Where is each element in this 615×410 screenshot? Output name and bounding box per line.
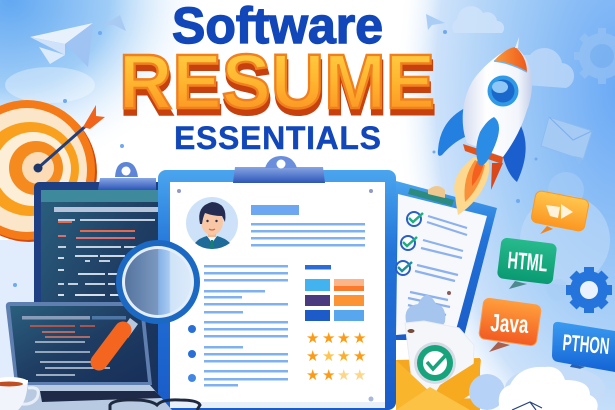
icon: magnifying glass xyxy=(99,240,200,362)
panel: checklist clipboard xyxy=(396,181,497,340)
colour swatches xyxy=(305,279,364,321)
speech bubble: Java xyxy=(478,298,542,352)
body text lines xyxy=(204,265,288,386)
speech bubble: play icon xyxy=(530,190,590,234)
right fin xyxy=(503,126,526,182)
title: RESUME: RESUME xyxy=(119,39,435,125)
icon: dark plane lines bottom xyxy=(512,402,542,410)
document xyxy=(405,321,474,398)
title: RESUME: RESUME xyxy=(120,45,436,131)
center fin xyxy=(476,117,499,165)
star ratings xyxy=(306,329,366,384)
cloud top right xyxy=(452,6,504,33)
left fin xyxy=(438,107,470,156)
laptop base xyxy=(15,385,172,410)
check badge xyxy=(414,342,456,384)
speech bubble: HTML: HTML xyxy=(506,247,549,277)
icon: glasses xyxy=(110,400,200,410)
icon: coffee cup xyxy=(0,377,38,410)
avatar xyxy=(186,197,238,249)
bullet dots xyxy=(188,325,196,382)
clipboard clip xyxy=(98,162,156,190)
cloud behind rocket xyxy=(512,48,574,88)
panel: main clipboard xyxy=(158,156,396,410)
checklist items xyxy=(396,212,467,315)
flame xyxy=(454,157,503,215)
nose cone xyxy=(494,47,527,72)
icon: blue gear xyxy=(566,267,612,313)
speech bubble: Java: Java xyxy=(490,309,530,339)
code lines xyxy=(58,220,155,295)
speech bubble: Python xyxy=(552,322,615,374)
icon: decorative dots xyxy=(13,30,538,287)
icon: background gears xyxy=(547,172,584,301)
header text lines xyxy=(251,223,365,246)
icon: rocket xyxy=(438,37,532,215)
clipboard clip xyxy=(233,156,325,183)
title: ESSENTIALS: ESSENTIALS xyxy=(174,120,381,156)
star ratings: ★★★★ xyxy=(306,329,366,347)
icon: envelope light blue xyxy=(541,117,592,165)
icon: small paper plane right xyxy=(426,14,445,30)
star ratings: ★★★★ xyxy=(306,366,366,384)
window xyxy=(488,76,518,106)
laptop code lines xyxy=(30,326,110,375)
body xyxy=(463,47,532,157)
speech bubble: HTML xyxy=(497,237,557,289)
cloud on checklist xyxy=(406,295,445,330)
clouds bottom right xyxy=(469,366,605,410)
icon: gear background top right xyxy=(574,28,615,84)
star ratings: ★★★★ xyxy=(306,347,366,365)
icon: envelope with document xyxy=(396,321,481,410)
icon: paper plane large xyxy=(30,23,93,67)
arrow in target xyxy=(34,105,105,172)
skills bar xyxy=(305,265,331,270)
panel: left dark clipboard with code xyxy=(34,162,166,410)
icon: paper plane small xyxy=(103,15,126,31)
icon: target xyxy=(0,100,105,242)
laptop xyxy=(6,302,172,410)
header name bar xyxy=(251,205,299,215)
exhaust ring xyxy=(463,144,503,164)
checklist clip xyxy=(408,186,454,206)
